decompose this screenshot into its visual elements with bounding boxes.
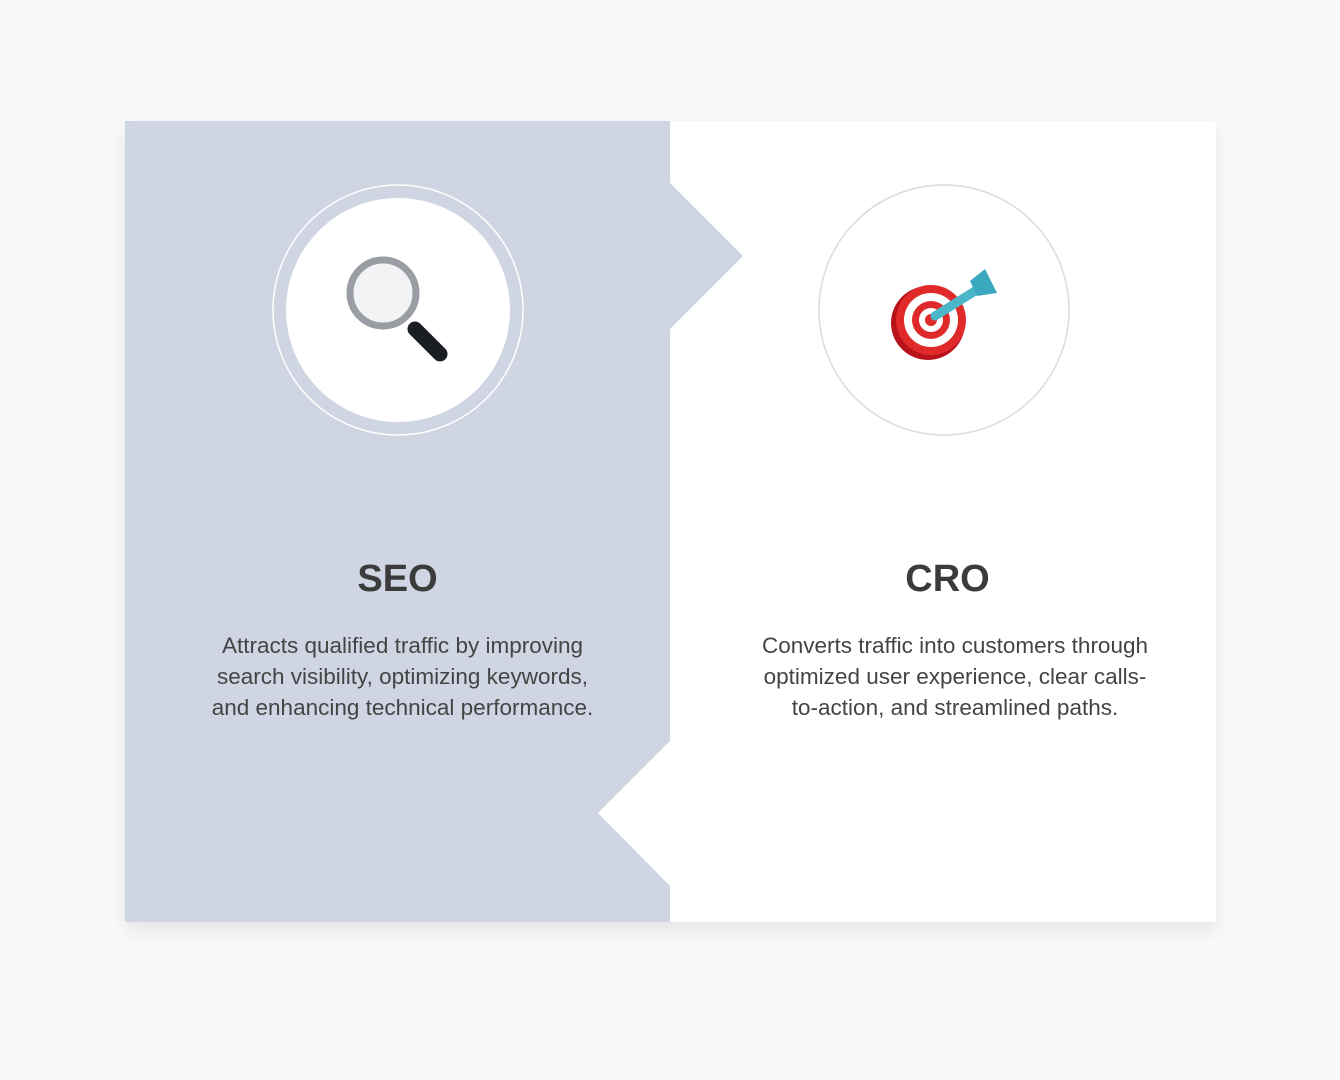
text: SEO description: and enhancing technical performance. <box>212 695 593 720</box>
shapes: panels and arrows <box>125 121 1070 922</box>
text: SEO description: search visibility, optimizing keywords, <box>217 664 588 689</box>
icon: target with dart <box>891 269 997 360</box>
title: SEO: SEO <box>357 558 438 600</box>
title: CRO: CRO <box>905 558 990 600</box>
icon: magnifier <box>350 260 440 354</box>
text: CRO description: Converts traffic into customers through <box>762 633 1148 658</box>
text: SEO description: Attracts qualified traffic by improving <box>222 633 583 658</box>
text: CRO description: to-action, and streamlined paths. <box>792 695 1118 720</box>
panel: SEO background with arrow <box>125 121 743 922</box>
text: CRO description <box>762 633 1148 720</box>
text: CRO description: optimized user experience, clear calls- <box>764 664 1146 689</box>
text: SEO description <box>212 633 593 720</box>
icon circle: SEO <box>273 185 523 435</box>
icon circle: CRO <box>819 185 1069 435</box>
card <box>125 121 1216 922</box>
